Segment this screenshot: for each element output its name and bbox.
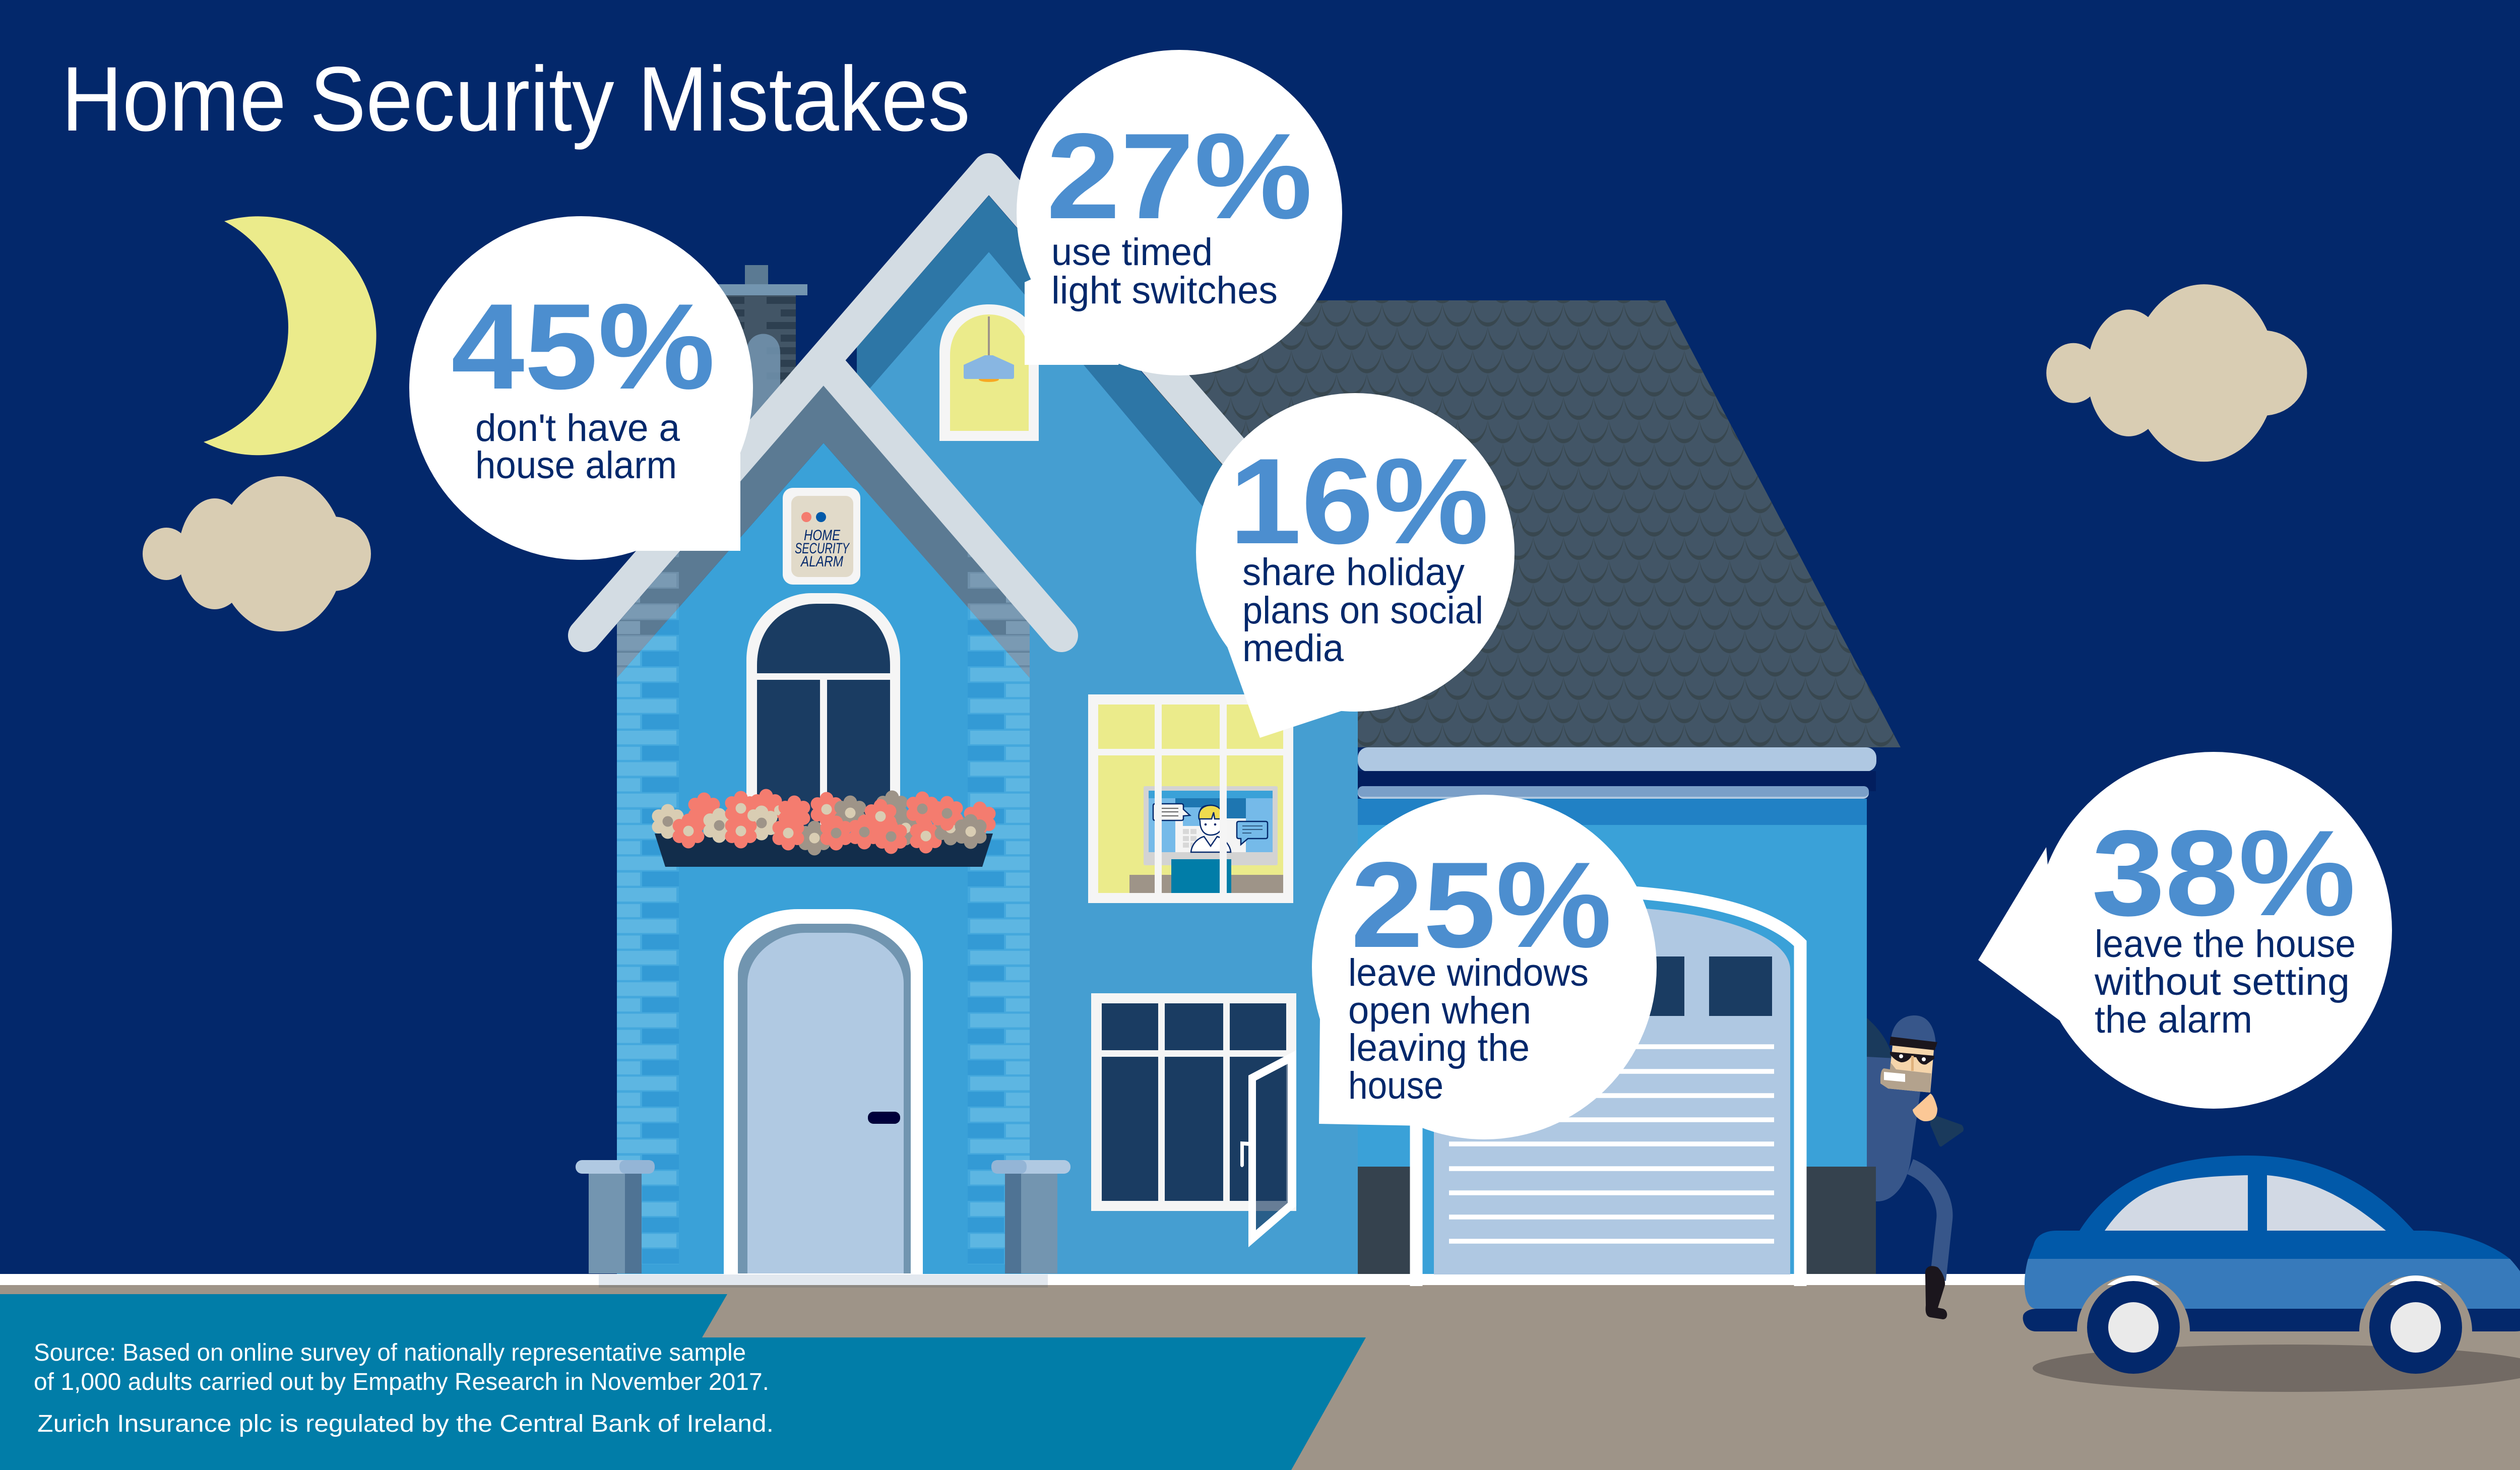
garage	[1358, 747, 1876, 1286]
callout: 38% not setting the alarm: 38%	[2092, 805, 2356, 941]
open window	[1091, 993, 1296, 1247]
callout: 27% timed light switches: use timed	[1051, 231, 1213, 274]
callout: 25% leave windows open: house	[1348, 1064, 1443, 1107]
rear wheel	[2359, 1275, 2472, 1379]
callout: 25% leave windows open: open when	[1348, 989, 1531, 1032]
front wheel	[2077, 1275, 2190, 1379]
car roof	[2080, 1156, 2414, 1231]
callout: 45% no house alarm: don't have a	[475, 407, 680, 450]
callout: 45% no house alarm	[409, 216, 753, 560]
callout: 38% not setting the alarm: without setting	[2094, 961, 2350, 1003]
chimney	[717, 265, 807, 454]
source note: Zurich Insurance plc is regulated by the Central Bank of Ireland.	[37, 1411, 774, 1437]
alarm box sign: SECURITY	[795, 540, 850, 557]
tiled garage roof	[1104, 300, 1901, 747]
garage door slats	[1449, 1047, 1774, 1241]
car side windows	[2105, 1175, 2386, 1231]
callout: 38% not setting the alarm: the alarm	[2095, 998, 2252, 1041]
ground and road	[0, 1274, 2520, 1470]
title: Home Security Mistakes	[61, 47, 970, 150]
callout: 45% no house alarm: house alarm	[475, 444, 677, 487]
source note: Source: Based on online survey of nationally representative sample	[34, 1339, 746, 1366]
callout: 16% share holiday plans: media	[1242, 627, 1344, 670]
flower box	[652, 789, 996, 867]
lit window with person at screen	[1088, 694, 1293, 903]
car sill	[2023, 1309, 2520, 1331]
left bin	[576, 1160, 655, 1273]
callout: 25% leave windows open: leaving the	[1348, 1027, 1530, 1069]
icon: crescent moon	[204, 216, 376, 455]
callout: 38% not setting the alarm: leave the house	[2095, 923, 2356, 966]
garage door	[1434, 907, 1790, 1274]
callout: 25% leave windows open	[1312, 795, 1657, 1139]
right bin	[991, 1160, 1070, 1273]
doorstep	[599, 1274, 1048, 1288]
footer panel	[0, 1294, 1366, 1470]
callout: 25% leave windows open: leave windows	[1348, 951, 1589, 994]
main house upper gable wall	[857, 196, 1358, 1274]
garage windows	[1621, 956, 1772, 1016]
alarm box sign	[783, 488, 860, 585]
callout: 16% share holiday plans: 16%	[1229, 433, 1489, 569]
car lower body	[2025, 1259, 2520, 1309]
callout: 45% no house alarm: 45%	[451, 279, 715, 415]
callout: 27% timed light switches: 27%	[1046, 108, 1312, 244]
callout: 27% timed light switches	[1017, 50, 1342, 375]
source note: of 1,000 adults carried out by Empathy Research in November 2017.	[34, 1369, 769, 1395]
garage door frame	[1416, 891, 1800, 1286]
callout: 16% share holiday plans	[1196, 393, 1515, 738]
front door	[724, 909, 923, 1275]
icon: right cloud	[2046, 284, 2307, 462]
front wall with brick quoins	[617, 386, 1030, 1274]
icon: left cloud	[143, 476, 371, 631]
burglar	[1867, 1015, 1964, 1319]
alarm box sign: ALARM	[800, 553, 843, 570]
car	[2023, 1156, 2520, 1392]
car upper body	[2028, 1231, 2510, 1259]
alarm box sign: HOME	[804, 527, 841, 544]
callout: 16% share holiday plans: plans on social	[1242, 589, 1483, 632]
callout: 16% share holiday plans: share holiday	[1242, 551, 1465, 594]
attic window with lamp	[939, 304, 1039, 441]
callout: 38% not setting the alarm	[1978, 752, 2392, 1109]
callout: 27% timed light switches: light switches	[1051, 269, 1278, 312]
upstairs arched window	[746, 593, 900, 829]
source note	[34, 1339, 774, 1437]
callout: 25% leave windows open: 25%	[1351, 837, 1612, 973]
roof bargeboards	[585, 170, 1320, 635]
car shadow	[2033, 1345, 2520, 1392]
